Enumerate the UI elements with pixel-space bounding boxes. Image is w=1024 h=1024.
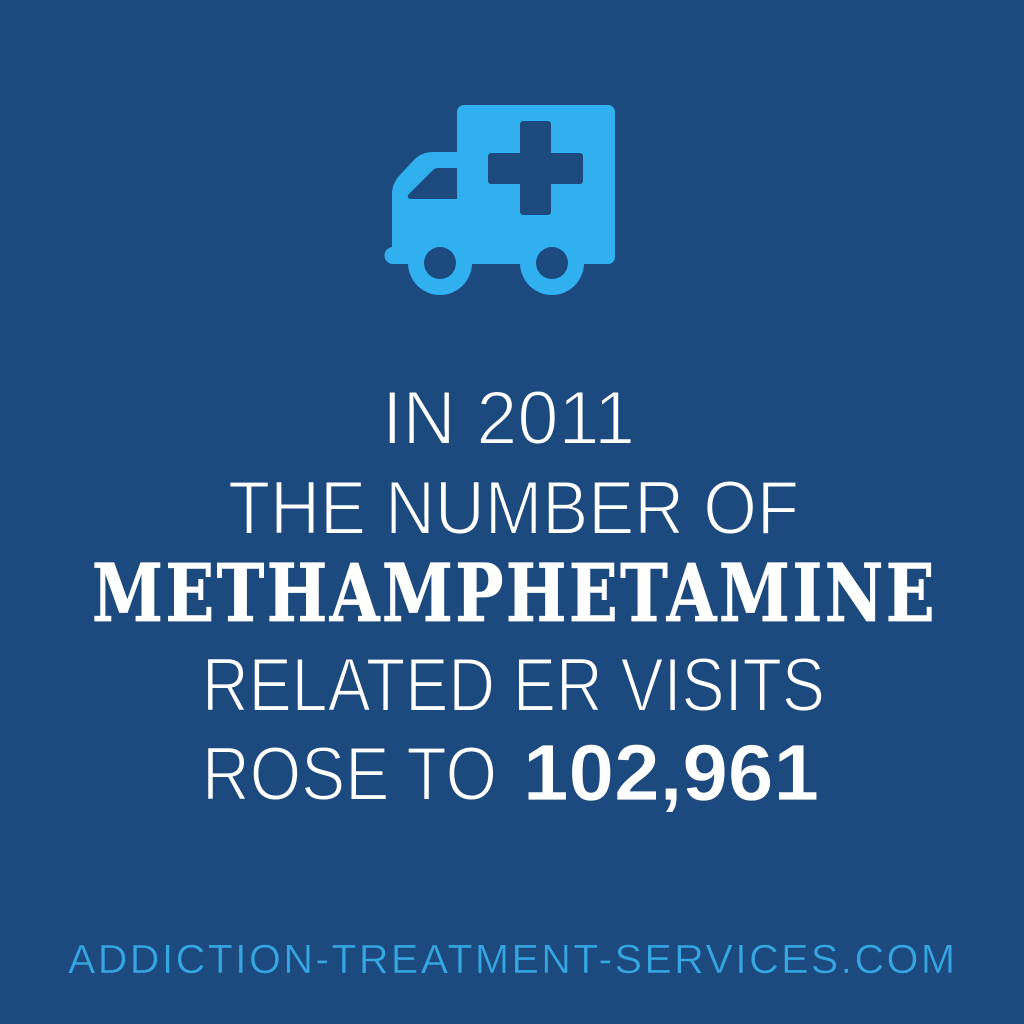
icon: ambulance — [384, 105, 615, 295]
text line: ROSE TO: ROSE TO — [202, 732, 497, 817]
text line: THE NUMBER OF: THE NUMBER OF — [228, 466, 799, 551]
statistic: 102,961: 102,961 — [523, 728, 819, 817]
text line: RELATED ER VISITS: RELATED ER VISITS — [202, 643, 825, 728]
text line: IN 2011: IN 2011 — [382, 376, 635, 461]
footer website: ADDICTION-TREATMENT-SERVICES.COM — [68, 936, 955, 982]
